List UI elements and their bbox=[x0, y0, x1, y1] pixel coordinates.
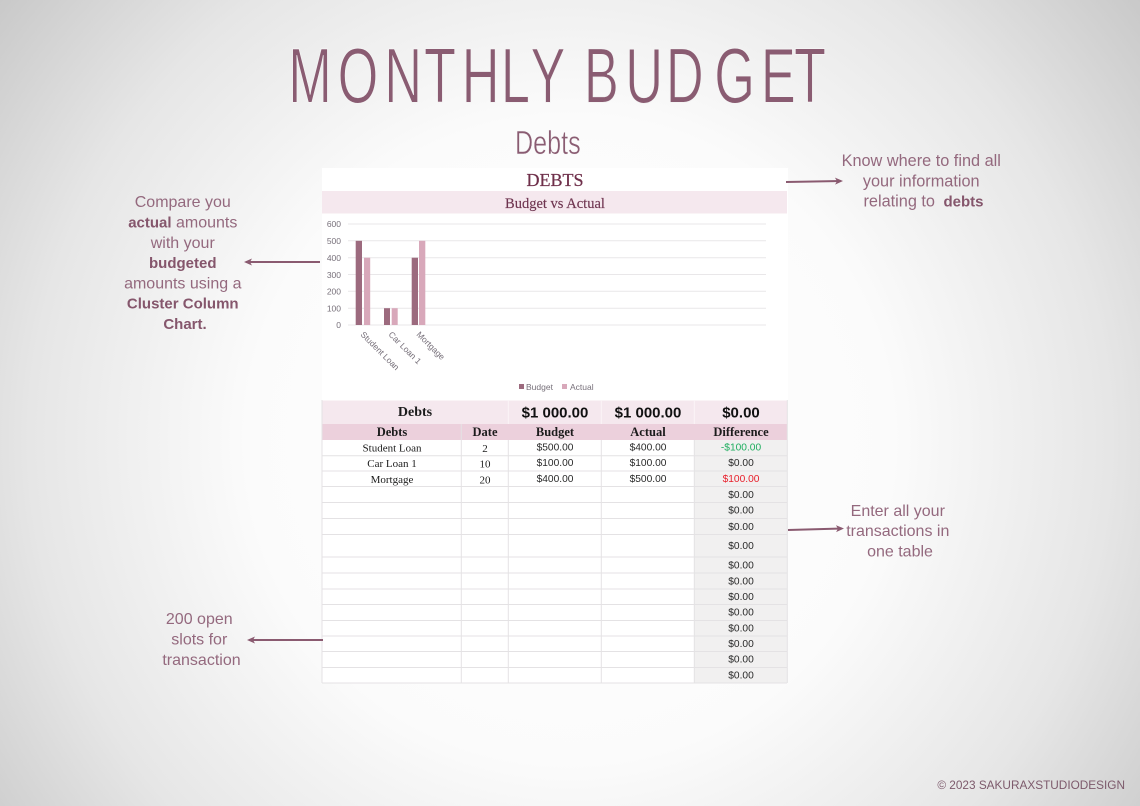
row: Student Loan: $400.00 bbox=[630, 442, 667, 454]
empty row difference values bbox=[728, 490, 754, 682]
y axis labels: 300 bbox=[327, 270, 341, 280]
legend: Budget bbox=[526, 382, 554, 392]
y axis labels: 500 bbox=[327, 236, 341, 246]
row: Student Loan bbox=[363, 442, 761, 455]
y axis labels bbox=[327, 219, 341, 330]
grid lines bbox=[322, 400, 787, 683]
title: MONTHLY BUDGET bbox=[288, 33, 826, 120]
category labels bbox=[359, 329, 447, 372]
empty row difference values: $0.00 bbox=[728, 560, 754, 572]
header row bbox=[322, 424, 787, 440]
row: Student Loan: 2 bbox=[482, 443, 488, 455]
callout: enter transactions: Enter all your bbox=[851, 503, 946, 520]
y axis labels: 400 bbox=[327, 253, 341, 263]
panel: chart sheet bbox=[322, 168, 788, 400]
header row: Actual bbox=[630, 425, 666, 439]
header row: Difference bbox=[713, 425, 769, 439]
callout: compare amounts: with your bbox=[150, 235, 215, 252]
empty row difference values: $0.00 bbox=[728, 576, 754, 588]
row: Mortgage bbox=[371, 474, 760, 486]
empty row difference values: $0.00 bbox=[728, 506, 754, 516]
callout: open slots: transaction bbox=[162, 652, 241, 669]
row: Student Loan: -$100.00 bbox=[721, 442, 761, 454]
callout: compare amounts: actual amounts bbox=[128, 214, 237, 232]
total row: $1 000.00 bbox=[615, 404, 681, 422]
arrow: from sheet heading bbox=[786, 181, 841, 182]
category labels: Student Loan bbox=[359, 329, 402, 372]
row: Car Loan 1: 10 bbox=[480, 458, 491, 470]
callout: compare amounts: Compare you bbox=[135, 194, 231, 211]
total row: Debts bbox=[398, 405, 433, 420]
category labels: Mortgage bbox=[415, 329, 447, 362]
heading: DEBTS: DEBTS bbox=[526, 170, 584, 190]
heading band: Budget vs Actual bbox=[322, 191, 787, 214]
header row: Debts bbox=[377, 425, 407, 439]
row: Car Loan 1 bbox=[367, 458, 754, 470]
empty row difference values: $0.00 bbox=[728, 608, 754, 618]
empty row difference values: $0.00 bbox=[728, 490, 754, 501]
row: Mortgage: $400.00 bbox=[537, 474, 574, 485]
row: Car Loan 1: $100.00 bbox=[630, 458, 667, 469]
total row: $0.00 bbox=[722, 404, 760, 422]
empty row difference values: $0.00 bbox=[728, 522, 754, 533]
arrow: from table bbox=[788, 528, 842, 530]
bars bbox=[356, 241, 425, 325]
difference column background bbox=[694, 440, 787, 683]
bar chart bbox=[327, 219, 766, 392]
row: Student Loan: Student Loan bbox=[363, 442, 422, 454]
empty row difference values: $0.00 bbox=[728, 624, 754, 634]
row: Mortgage: 20 bbox=[480, 474, 491, 486]
legend: Actual bbox=[570, 382, 594, 392]
heading band: Budget vs Actual: Budget vs Actual bbox=[505, 196, 605, 212]
row: Mortgage: Mortgage bbox=[371, 474, 413, 486]
row: Car Loan 1: Car Loan 1 bbox=[367, 458, 417, 470]
y axis labels: 100 bbox=[327, 304, 341, 314]
header row: Budget bbox=[536, 425, 575, 439]
category labels: Car Loan 1 bbox=[387, 329, 424, 366]
callout: enter transactions: one table bbox=[867, 544, 933, 560]
y axis labels: 0 bbox=[336, 320, 341, 330]
callout: know where to find: Know where to find all bbox=[842, 152, 1001, 170]
row: Mortgage: $500.00 bbox=[630, 474, 667, 485]
arrow: to table rows bbox=[249, 639, 323, 641]
total row: $1 000.00 bbox=[522, 404, 588, 422]
header row: Date bbox=[472, 425, 498, 439]
row: Car Loan 1: $0.00 bbox=[728, 458, 754, 469]
callout: enter transactions: transactions in bbox=[846, 523, 949, 540]
callout: open slots: 200 open bbox=[166, 611, 233, 628]
y axis labels: 200 bbox=[327, 286, 341, 296]
row: Mortgage: $100.00 bbox=[723, 474, 760, 485]
empty row difference values: $0.00 bbox=[728, 639, 754, 650]
callout: know where to find: your information bbox=[863, 172, 980, 190]
y axis labels: 600 bbox=[327, 219, 341, 229]
callout: compare amounts: Chart. bbox=[163, 316, 207, 333]
row: Student Loan: $500.00 bbox=[537, 442, 574, 454]
total row bbox=[322, 400, 787, 424]
copyright: © 2023 SAKURAXSTUDIODESIGN bbox=[937, 778, 1125, 792]
row: Car Loan 1: $100.00 bbox=[537, 458, 574, 469]
callout: compare amounts: Cluster Column bbox=[127, 296, 239, 312]
callout: open slots: slots for bbox=[171, 632, 228, 648]
empty row difference values: $0.00 bbox=[728, 541, 754, 552]
arrow: to chart bbox=[246, 261, 320, 263]
callout: compare amounts: budgeted bbox=[149, 255, 217, 272]
panel: debts table bbox=[322, 400, 787, 683]
callout: know where to find: relating to debts bbox=[863, 192, 984, 210]
empty row difference values: $0.00 bbox=[728, 592, 754, 603]
subtitle: Debts bbox=[515, 125, 581, 162]
legend bbox=[519, 382, 594, 392]
empty row difference values: $0.00 bbox=[728, 654, 754, 666]
callout: compare amounts: amounts using a bbox=[124, 276, 242, 292]
empty row difference values: $0.00 bbox=[728, 670, 754, 682]
